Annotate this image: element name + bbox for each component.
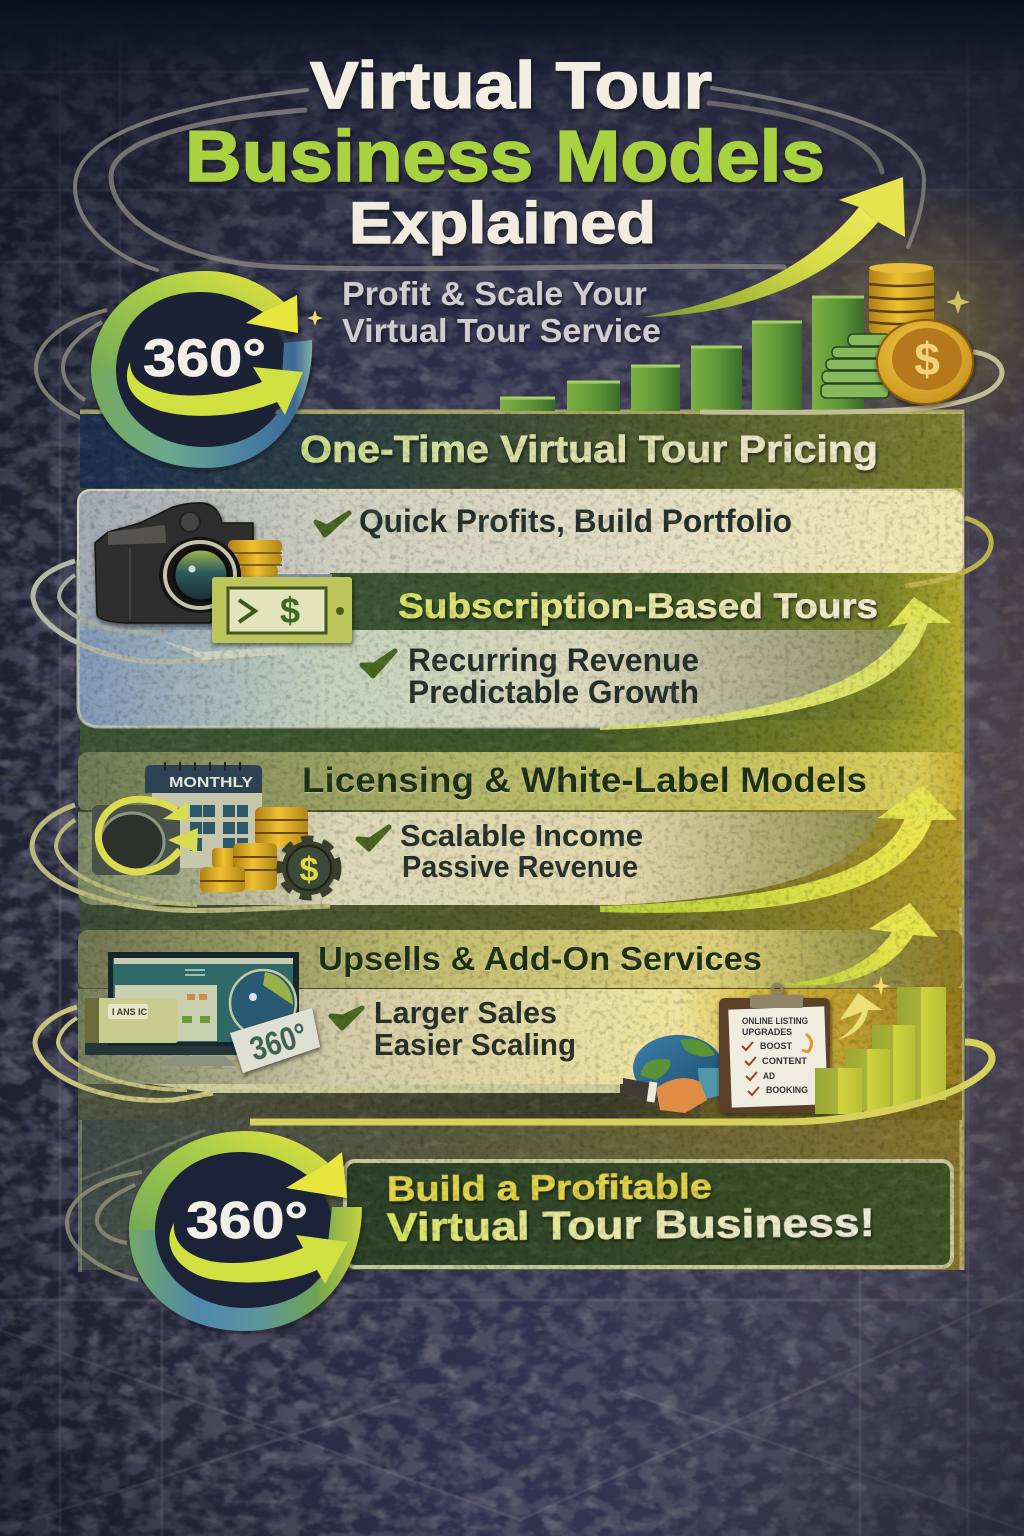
title line: explained: Explained: [349, 191, 656, 256]
lower band: upsells: [78, 988, 962, 1120]
dollar gear: $: [300, 851, 319, 889]
olive backdrop: subscription: [330, 573, 962, 752]
icon: clipboard checklist: CONTENT: [762, 1056, 808, 1066]
cream body: licensing: [78, 812, 880, 905]
icon: clipboard checklist: BOOST: [760, 1041, 792, 1051]
icon: clipboard checklist: BOOKING: [766, 1085, 808, 1095]
benefit: scalable income: Scalable Income: [400, 818, 643, 853]
benefit: easier scaling: Easier Scaling: [374, 1027, 576, 1062]
header band: upsells: [78, 930, 962, 990]
cta line one: Build a Profitable: [387, 1167, 712, 1209]
arrow: subscription growth: [600, 597, 952, 730]
icon: dollar coin: [877, 320, 973, 404]
subtitle: [342, 275, 661, 349]
header band: one-time pricing: [80, 414, 962, 488]
icon: clipboard checklist: AD: [763, 1071, 775, 1081]
check: recurring revenue: [362, 651, 395, 676]
cream body: upsells: [78, 989, 962, 1084]
camera ring: [92, 799, 198, 875]
calendar: MONTHLY: [169, 774, 253, 791]
cash tablet: [212, 577, 352, 643]
benefit: quick profits: Quick Profits, Build Portfolio: [359, 503, 792, 539]
icon: globe and handshake: [623, 1035, 723, 1113]
icon: 360 ring bottom: [129, 1131, 362, 1331]
heading: upsells: Upsells & Add-On Services: [318, 940, 762, 977]
cash tablet: $: [280, 590, 300, 631]
title line: virtual tour: Virtual Tour: [310, 48, 712, 122]
benefit: larger sales: Larger Sales: [374, 995, 557, 1030]
ring lower band: [129, 1207, 362, 1331]
bar chart: upsell growth: [815, 987, 946, 1114]
title block: [185, 48, 825, 256]
swoosh: right top: [905, 518, 991, 586]
subtitle: Profit & Scale Your: [342, 275, 647, 312]
small card: [85, 998, 178, 1043]
360 tag: [230, 1008, 320, 1073]
body card: subscription: [78, 630, 905, 727]
icon: clipboard checklist: ONLINE LISTING: [742, 1016, 808, 1026]
ring lower band: [91, 340, 312, 468]
camera body: [95, 503, 253, 623]
ring arrow head: [246, 295, 298, 333]
icon: monitor and 360 card: [85, 952, 320, 1073]
ring disc: [112, 288, 288, 452]
lower strip: subscription: [80, 720, 962, 752]
icon: gold sparkle: [872, 976, 890, 996]
camera lens: [159, 537, 241, 613]
swoosh: left licensing loop: [32, 805, 330, 911]
ring label: 360°: [143, 329, 266, 388]
icon: 360 ring top: [91, 271, 312, 468]
left card: subscription: [78, 566, 332, 727]
benefit: recurring revenue: Recurring Revenue: [408, 642, 699, 678]
coin stacks: [200, 807, 308, 892]
panel: subscription tours: [33, 518, 991, 752]
benefit: predictable growth: Predictable Growth: [408, 674, 699, 710]
ring label: 360°: [186, 1192, 308, 1250]
meter gauge: [230, 970, 296, 1036]
benefit: passive revenue: Passive Revenue: [402, 849, 638, 884]
ring upper band: [129, 1131, 328, 1232]
cta line two: Virtual Tour Business!: [387, 1201, 875, 1250]
cta band: [345, 1161, 952, 1267]
icon: coin stack: [869, 263, 934, 334]
check: larger sales: [331, 1008, 362, 1028]
ring disc: [153, 1147, 333, 1315]
card rim: [78, 560, 620, 727]
inner arrow: [169, 1223, 348, 1284]
swoosh: right of coin: [700, 352, 1002, 412]
heading: one-time pricing: One-Time Virtual Tour Pricing: [300, 429, 878, 471]
grain overlay: [78, 412, 964, 1272]
panel: licensing and white-label: [32, 752, 962, 913]
small card: I ANS IC: [112, 1007, 148, 1017]
inner arrow: [127, 362, 303, 416]
divider rail: upsells: [150, 1084, 620, 1093]
calendar: [145, 762, 262, 868]
subtitle: Virtual Tour Service: [342, 312, 661, 349]
check: scalable income: [358, 827, 389, 849]
icon: camera and cash: [95, 503, 352, 643]
heading: subscription: Subscription-Based Tours: [398, 587, 878, 626]
lower backing: licensing: [78, 810, 962, 908]
icon: sparkles: [307, 290, 970, 326]
swoosh: upsell right ribbon: [250, 1042, 992, 1122]
icon: clipboard checklist: [719, 984, 830, 1113]
arrow: upsell growth: [783, 903, 938, 986]
360 tag: 360°: [245, 1015, 312, 1068]
title swoosh rings: [75, 88, 924, 270]
header band: licensing: [78, 752, 962, 812]
gold tail: right: [700, 1084, 962, 1120]
heading: licensing: Licensing & White-Label Models: [302, 761, 867, 800]
ring arrow head: [286, 1152, 347, 1198]
check: quick profits: [316, 513, 349, 535]
title line: business models: Business Models: [185, 117, 825, 197]
panel: upsells and add-ons: [35, 903, 962, 1120]
panel: call to action: [345, 1161, 952, 1267]
top left ring swooshes: [36, 310, 110, 428]
ring upper band: [91, 271, 284, 372]
icon: cash stack: [821, 334, 890, 398]
monitor: [85, 952, 299, 1066]
body card: one-time pricing: [78, 490, 963, 574]
panel: one-time pricing: [78, 414, 963, 574]
bar chart: growth: [500, 297, 864, 411]
swoosh: left camera loop: [33, 561, 290, 662]
coin stack: [228, 540, 282, 577]
arrow: title growth: [643, 177, 905, 317]
bottom ring swooshes: [67, 1172, 142, 1280]
main content column: [80, 412, 962, 1272]
icon: clipboard checklist: UPGRADES: [742, 1027, 792, 1037]
swoosh: upsell left loops: [35, 1007, 213, 1100]
icon: dollar coin: $: [914, 333, 940, 385]
icon: calendar coins gear: [92, 762, 336, 895]
dollar gear: [282, 841, 336, 895]
arrow: licensing growth: [600, 785, 957, 913]
